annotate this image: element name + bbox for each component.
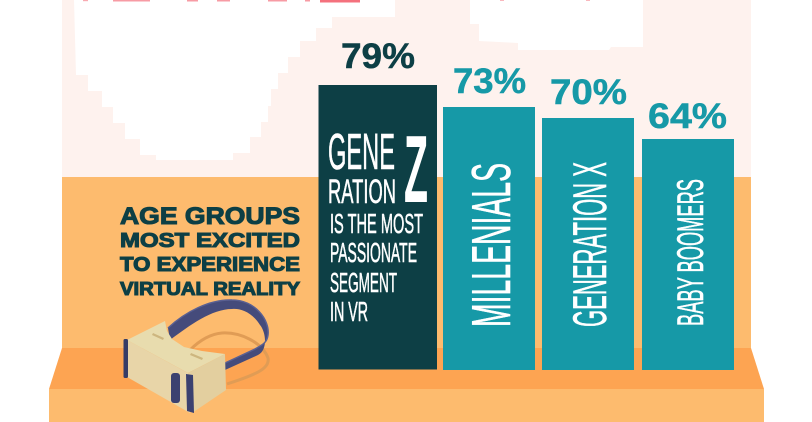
bar: Generation X 70%	[542, 73, 634, 370]
bar: Generation Z 79%: Z	[404, 116, 428, 223]
headset left edge strip	[124, 339, 128, 378]
bar: Generation Z 79%	[318, 37, 437, 370]
value: 79%: 79%	[341, 37, 415, 76]
headset strap upper edge	[168, 300, 268, 363]
icon: VR headset	[124, 300, 268, 413]
panel: front ledge	[49, 389, 764, 422]
label: Generation Z is the most passionate segment in VR	[328, 116, 428, 327]
heading: age groups most excited: AGE GROUPS	[120, 203, 300, 230]
heading: age groups most excited	[120, 203, 300, 299]
bar: Baby Boomers 64%	[642, 97, 734, 370]
headset top face	[127, 321, 225, 373]
heading: age groups most excited: TO EXPERIENCE	[120, 254, 300, 276]
headset side face	[188, 354, 226, 413]
heading: age groups most excited: MOST EXCITED	[120, 229, 300, 252]
bar chart	[318, 37, 734, 370]
label: Generation Z is the most passionate segment in VR: IS THE MOST	[330, 208, 423, 239]
bar: Baby Boomers 64%: BABY BOOMERS	[670, 179, 711, 326]
label: Millenials: MILLENIALS	[460, 163, 522, 327]
panel: orange wall	[62, 177, 751, 348]
panel: pale pink wall	[62, 0, 751, 177]
white erased area, right	[470, 0, 643, 50]
bar: Millenials 73%	[443, 62, 535, 370]
label: Generation Z is the most passionate segment in VR: IN VR	[330, 296, 368, 327]
white erased area, left	[74, 0, 395, 160]
label: Generation Z is the most passionate segment in VR: GENE	[328, 123, 395, 180]
headset strap	[168, 300, 268, 370]
heading: age groups most excited: VIRTUAL REALITY	[120, 279, 300, 299]
headset front face	[127, 340, 190, 413]
cropped red heading remnants	[83, 0, 590, 2]
panel: darker orange floor	[49, 348, 764, 389]
label: Generation Z is the most passionate segment in VR: RATION	[328, 173, 396, 211]
headset top tabs	[152, 333, 203, 360]
value: 64%: 64%	[648, 97, 727, 136]
value: 73%: 73%	[453, 62, 526, 101]
headset lens slot	[171, 373, 180, 403]
headset right edge strip	[186, 374, 194, 413]
label: Generation Z is the most passionate segment in VR: SEGMENT	[330, 267, 397, 298]
headset shadow	[190, 333, 268, 384]
label: Generation Z is the most passionate segment in VR: PASSIONATE	[330, 237, 417, 268]
value: 70%: 70%	[550, 73, 627, 112]
